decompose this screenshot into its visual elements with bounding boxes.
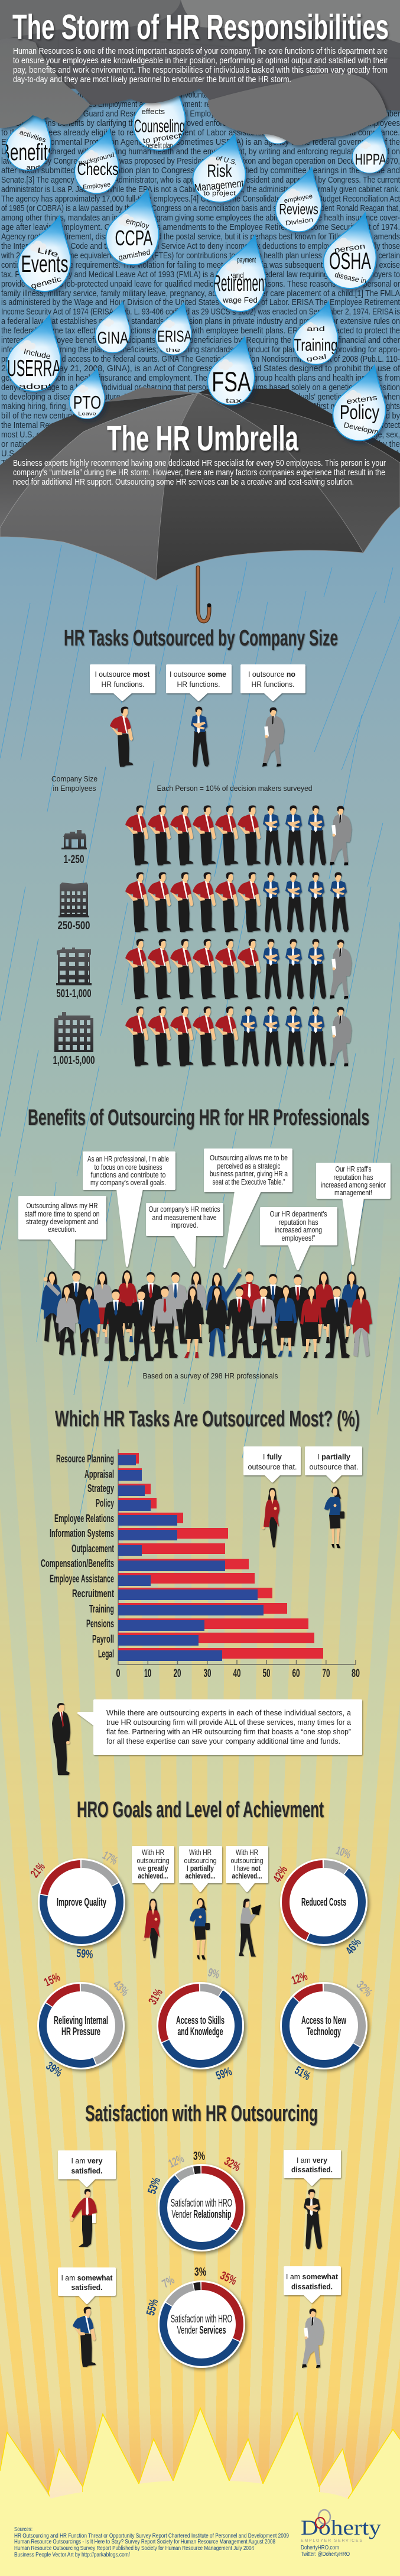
bubble: outsource some: I outsource some	[170, 670, 226, 679]
icon: tower: 1,001-5,000	[53, 1055, 95, 1067]
row: Payroll	[92, 1633, 314, 1646]
axis lines and ticks	[118, 1449, 356, 1665]
legend bubbles and people	[91, 666, 304, 767]
row: Information Systems: Information Systems	[50, 1527, 114, 1539]
yellow spike edges	[0, 2408, 400, 2499]
drop: Events: Life	[37, 245, 59, 259]
donut: Vendor Services: 3%	[194, 2266, 206, 2279]
donut: Improve Quality: 17%	[100, 1849, 119, 1868]
callout: one stop shop: flat fee. Partnering with an HR outsourcing firm that boasts a “one stop shop”	[106, 1727, 351, 1736]
bubble: somewhat satisfied: satisfied.	[71, 2283, 103, 2292]
donut: Access to New Technology: 51%	[292, 2064, 313, 2083]
drop: Reviews: Reviews	[279, 202, 318, 218]
bubble: department reputation: Our HR department's	[269, 1210, 327, 1218]
person: red shirt	[110, 706, 133, 767]
drop: GINA	[95, 301, 130, 353]
drop: Retirement: Retirement	[213, 271, 268, 296]
drop: PTO: PTO	[73, 391, 101, 413]
row: Employee Assistance: Employee Assistance	[50, 1573, 114, 1585]
axis numbers: 20	[174, 1667, 181, 1680]
bubble: strategic partner: perceived as a strategic	[217, 1162, 280, 1170]
drop: ERISA	[155, 303, 192, 355]
bubble: senior management: Our HR staff's	[336, 1165, 371, 1173]
row: 250-500 people	[125, 872, 349, 932]
callout: one stop shop: for all these expertise can save your company additional time and funds.	[106, 1737, 340, 1746]
row: Compensation/Benefits	[41, 1558, 249, 1571]
donut: Relieving Internal HR Pressure: 43%	[110, 1978, 131, 1999]
drop: Events: genetic	[30, 274, 63, 290]
icon: tower	[53, 1012, 95, 1067]
row: Strategy: Strategy	[87, 1482, 114, 1494]
axis label: company size: in Empolyees	[53, 784, 96, 793]
bubble: strategic partner: seat at the Executive Table.”	[213, 1178, 285, 1186]
donut: Vendor Services: Vender Services	[177, 2324, 226, 2336]
row: Employee Assistance	[50, 1573, 255, 1586]
row: 1001-5000 people	[125, 1006, 352, 1066]
bubble: department reputation: reputation has	[279, 1218, 318, 1227]
donut: Access to New Technology: 32%	[354, 1978, 375, 2000]
bubble: not achieved: outsourcing	[230, 1857, 264, 1865]
row: Policy	[96, 1497, 157, 1511]
bubble: department reputation	[261, 1208, 336, 1269]
donut: Vendor Relationship: Satisfaction with HRO	[171, 2197, 232, 2209]
bubble: outsource some	[167, 666, 230, 700]
drop: Benefits: and	[26, 164, 40, 171]
drop: Retirement: and	[232, 271, 244, 280]
bubble: very dissatisfied: dissatisfied.	[291, 2165, 333, 2174]
person: woman grey blouse	[239, 1899, 261, 1957]
donut: Access to Skills and Knowledge: 9%	[207, 1966, 221, 1981]
bubble: very satisfied: satisfied.	[71, 2166, 103, 2175]
satisfaction bubbles and people	[59, 2151, 340, 2368]
drop: Events: Events	[21, 251, 69, 277]
bubble: senior management: management!	[334, 1189, 372, 1197]
drop: Risk Management	[193, 134, 246, 202]
logo: Doherty: Twitter: @DohertyHRO	[301, 2551, 350, 2558]
bubble: senior management: reputation has	[333, 1173, 373, 1182]
person: woman blue jacket	[324, 1487, 344, 1548]
bubble: not achieved: achieved...	[232, 1872, 262, 1880]
drop: hidden behind cloud	[263, 102, 292, 144]
person: woman blue jacket	[190, 1898, 210, 1959]
person: grey suit	[262, 707, 284, 767]
drop: FSA: FSA	[212, 366, 251, 398]
donut: Access to Skills and Knowledge	[147, 1966, 244, 2082]
row: 1-250 people	[125, 805, 352, 865]
donut: Improve Quality: 59%	[76, 1947, 94, 1961]
legend note: Each Person = 10% of decision makers surveyed	[157, 784, 312, 793]
drop: Risk Management: of U.S.	[215, 154, 238, 167]
bubble: focus on core: my company's overall goals.	[90, 1179, 166, 1187]
bubble: focus on core	[84, 1153, 174, 1266]
bubble: not achieved: I have not	[233, 1864, 261, 1873]
cloud: right grey bank	[208, 73, 388, 145]
row: Recruitment: Recruitment	[72, 1588, 114, 1600]
bubble: staff time	[19, 1197, 105, 1268]
donut: Vendor Relationship: 32%	[222, 2155, 243, 2174]
drop: USERRA: Include	[23, 346, 51, 361]
intro paragraph	[13, 46, 388, 85]
donut: Reduced Costs: 42%	[271, 1864, 290, 1885]
drop: Training: goal	[306, 353, 327, 363]
row: 501-1000 people	[125, 939, 352, 999]
icon: mid building: 250-500	[58, 920, 90, 932]
person: red shirt with papers	[69, 2189, 97, 2247]
bubble: outsource no	[242, 666, 304, 700]
icon: small office	[61, 830, 87, 866]
donut: Vendor Services	[144, 2266, 245, 2368]
bubble: department reputation: increased among	[275, 1226, 322, 1234]
drop: OSHA: disease in	[334, 270, 368, 285]
bubble: somewhat dissatisfied	[285, 2267, 340, 2302]
sources: Human Resource Outsourcing Survey Report Published by Society for Human Resource Management July 2004	[14, 2545, 254, 2552]
drop: FSA	[207, 337, 255, 405]
drop: Retirement	[213, 235, 268, 312]
bubble: greatly achieved	[133, 1847, 173, 1891]
drop: Policy	[333, 365, 386, 440]
drop: Retirement: payment	[237, 256, 256, 264]
bubble: partially: outsource that.	[310, 1462, 358, 1471]
donut: Access to New Technology: 12%	[290, 1970, 310, 1987]
person: blue shirt	[191, 706, 209, 767]
axis numbers: 70	[323, 1667, 330, 1680]
row: Payroll: Payroll	[92, 1633, 114, 1645]
drop: PTO	[69, 368, 105, 418]
drop: Benefits: activities	[18, 129, 47, 144]
bubble: department reputation: employees!”	[281, 1234, 316, 1242]
intro paragraph: day-to-day and they are most likely personnel to encounter the brunt of the HR storm.	[13, 74, 291, 85]
logo: Doherty	[301, 2510, 381, 2558]
bubble: greatly achieved: outsourcing	[137, 1857, 170, 1865]
raindrops falling from the storm	[0, 76, 387, 391]
bar chart: tasks outsourced	[41, 1449, 360, 1680]
axis numbers: 50	[262, 1667, 271, 1680]
cloud: left grey bank	[0, 38, 90, 128]
axis label: company size: Company Size	[51, 774, 97, 783]
umbrella canopy panels	[106, 387, 198, 402]
survey note: Based on a survey of 298 HR professionals	[143, 1371, 278, 1380]
axis numbers: 0	[116, 1667, 121, 1680]
bubble: focus on core: functions and contribute to	[91, 1171, 166, 1179]
drop: Risk Management: Management	[194, 178, 245, 194]
sources: Human Resource Outsourcings - Is It Here to Stay? Survey Report Society for Human Resource Management August 2008	[14, 2538, 275, 2545]
drop: HIPPA	[352, 126, 387, 173]
donut: Relieving Internal HR Pressure	[37, 1971, 131, 2079]
bubble: somewhat satisfied: I am somewhat	[61, 2273, 113, 2282]
row: Legal: Legal	[98, 1648, 114, 1660]
callout: one stop shop: While there are outsourcing experts in each of these individual sectors, a	[106, 1708, 352, 1717]
sources: Sources:	[14, 2526, 32, 2533]
person: woman red coat	[262, 1488, 279, 1547]
axis numbers: 60	[292, 1667, 300, 1680]
background sun rays	[0, 1328, 400, 2494]
bubble: metrics: Our company's HR metrics	[149, 1205, 220, 1214]
raised arm, front row	[44, 1277, 59, 1295]
drop: CCPA: garnished	[118, 248, 151, 262]
axis numbers: 80	[352, 1667, 360, 1680]
background legal text wall	[1, 90, 400, 468]
sources: HR Outsourcing and HR Function Threat or Opportunity Survey Report Chartered Institute of Personnel and Development 2009	[14, 2532, 289, 2539]
bubble: fully	[245, 1448, 300, 1481]
bubble: staff time: Outsourcing allows my HR	[26, 1202, 98, 1210]
drop: Background Checks: Background	[78, 151, 115, 167]
row: Appraisal: Appraisal	[84, 1468, 114, 1480]
row: Outplacement: Outplacement	[71, 1543, 114, 1555]
drop: ERISA: the	[165, 347, 180, 353]
row: Employee Relations: Employee Relations	[54, 1513, 114, 1524]
donut: Access to New Technology: Access to New	[301, 2014, 347, 2026]
bubble: staff time: staff more time to spend on	[25, 1210, 100, 1218]
person: woman red coat	[142, 1899, 160, 1958]
drop: Background Checks: Checks	[77, 160, 118, 179]
bubble: outsource most	[91, 666, 154, 700]
bubble: somewhat dissatisfied: dissatisfied.	[291, 2282, 333, 2291]
axis numbers: 40	[233, 1667, 241, 1680]
logo rings	[316, 2510, 330, 2528]
bubble: partially achieved	[180, 1847, 221, 1891]
bubble: greatly achieved: achieved...	[138, 1872, 168, 1880]
row: Recruitment	[72, 1588, 272, 1600]
bubble: partially achieved: outsourcing	[184, 1857, 217, 1865]
axis numbers	[116, 1667, 360, 1680]
bubble: outsource no: HR functions.	[252, 680, 294, 689]
crowd of HR professionals	[41, 1268, 372, 1361]
rain streaks	[0, 545, 400, 1522]
sources	[14, 2526, 289, 2558]
drop: Counseling: to protect	[142, 131, 182, 145]
drop: Counseling: effects	[141, 108, 165, 116]
donut: Vendor Relationship: Vender Relationship	[171, 2208, 232, 2220]
donut: Vendor Services: 35%	[218, 2269, 239, 2288]
callout: one stop shop: true HR outsourcing firm will provide ALL of these services, many times for a	[106, 1718, 352, 1727]
drop: CCPA: CCPA	[115, 226, 153, 250]
bubble: very dissatisfied: I am very	[297, 2156, 328, 2165]
drop: Training: Training	[294, 336, 337, 355]
cloud: upper light bank	[181, 0, 400, 43]
donut: Access to Skills and Knowledge: 59%	[214, 2065, 234, 2082]
raised arm, back row	[225, 1268, 241, 1299]
drop: Policy: Policy	[340, 401, 380, 424]
bubble: very dissatisfied	[285, 2151, 340, 2185]
donut: Access to Skills and Knowledge: Access to Skills	[176, 2014, 225, 2026]
drop: CCPA: employ	[125, 216, 151, 231]
person: blue shirt	[73, 2306, 96, 2367]
sunburst footer	[0, 2406, 400, 2576]
drop: OSHA: OSHA	[329, 248, 371, 274]
bubble: greatly achieved: we greatly	[138, 1864, 168, 1873]
bubble: metrics	[147, 1204, 222, 1266]
donut: Relieving Internal HR Pressure: 15%	[43, 1971, 62, 1989]
donut: Improve Quality: 21%	[28, 1860, 48, 1880]
icon: small office: 1-250	[64, 854, 84, 866]
drop: Training	[293, 301, 338, 364]
bubble: fully: I fully	[263, 1452, 282, 1461]
drop: OSHA: person	[334, 241, 366, 255]
row: Policy: Policy	[96, 1497, 114, 1509]
axis label: company size	[51, 774, 97, 793]
bubble: partially achieved: I partially	[187, 1864, 214, 1873]
logo: Doherty: EMPLOYER SERVICES	[301, 2539, 363, 2543]
bubble: focus on core: As an HR professional, I'm able	[87, 1155, 169, 1163]
drop: Training: and	[307, 326, 325, 333]
logo: Doherty: DohertyHRO.com	[301, 2544, 339, 2551]
donut: Vendor Relationship: 3%	[193, 2150, 205, 2163]
drop: CCPA	[106, 189, 159, 265]
drop: Reviews: Division	[285, 216, 314, 227]
donut: Vendor Relationship: 53%	[145, 2176, 164, 2196]
donut: Relieving Internal HR Pressure: 39%	[44, 2059, 64, 2079]
icon: large building	[56, 948, 92, 1000]
bubble: staff time: strategy development and	[26, 1218, 98, 1226]
bubble: metrics: improved.	[170, 1221, 199, 1229]
bubble: outsource most: I outsource most	[95, 670, 150, 679]
row: Pensions: Pensions	[86, 1618, 114, 1630]
small spikes	[48, 2439, 353, 2503]
drop: USERRA: adopt	[18, 382, 52, 391]
row: Training	[89, 1603, 287, 1615]
umbrella handle	[198, 567, 212, 621]
donut: Reduced Costs: 46%	[343, 1936, 364, 1957]
axis numbers: 10	[144, 1667, 151, 1680]
donut: Improve Quality: Improve Quality	[57, 1896, 106, 1908]
bubble: not achieved: With HR	[236, 1848, 258, 1857]
row: Pensions	[86, 1618, 308, 1631]
bubble: partially achieved: With HR	[189, 1848, 212, 1857]
drop: Counseling: Counseling	[134, 116, 185, 136]
bubble: somewhat satisfied	[59, 2269, 115, 2303]
donut: Access to New Technology	[280, 1970, 375, 2083]
umbrella paragraph	[13, 458, 386, 487]
donut: Access to Skills and Knowledge: 31%	[147, 1987, 165, 2007]
bubble: outsource most: HR functions.	[102, 680, 144, 689]
drop: Policy: extens	[346, 392, 378, 406]
drop: Policy: Developm	[343, 420, 379, 436]
row: Outplacement	[71, 1543, 225, 1556]
donut: Relieving Internal HR Pressure: Relieving Internal	[54, 2014, 108, 2026]
donut: Relieving Internal HR Pressure: HR Pressure	[61, 2026, 100, 2038]
cloud: dark centre bank	[59, 35, 400, 112]
drop: ERISA: ERISA	[157, 327, 192, 345]
heading: The HR Umbrella: The HR Umbrella	[107, 419, 299, 458]
benefit speech bubbles	[19, 1150, 389, 1269]
umbrella	[0, 387, 400, 621]
drop: Risk Management: Risk	[207, 161, 232, 181]
row: Resource Planning: Resource Planning	[56, 1453, 114, 1465]
person: man in suit	[52, 1703, 70, 1775]
donut: Vendor Services: 55%	[144, 2298, 161, 2317]
logo: Doherty: Doherty	[301, 2516, 381, 2539]
donut: Reduced Costs: 10%	[334, 1844, 353, 1861]
drop: Reviews: employee	[284, 193, 313, 205]
front spikes and base	[0, 2408, 400, 2576]
bubble: partially achieved: achieved...	[186, 1872, 215, 1880]
bubble: strategic partner: business partner, giving HR a	[210, 1170, 288, 1178]
drop: USERRA	[6, 315, 61, 391]
bubble: metrics: and measurement have	[152, 1214, 217, 1222]
bubble: fully: outsource that.	[248, 1462, 297, 1471]
row: Legal	[98, 1648, 323, 1661]
donut: Reduced Costs	[271, 1844, 368, 1957]
donut: Access to New Technology: Technology	[307, 2026, 341, 2038]
callout: one stop shop	[79, 1701, 361, 1754]
bubble: senior management: increased among senior	[321, 1181, 386, 1189]
drop: OSHA	[323, 213, 376, 288]
drops landing on the umbrella	[69, 337, 386, 440]
donut: Improve Quality	[28, 1849, 125, 1961]
drop: GINA: GINA	[97, 329, 129, 347]
person: grey suit	[302, 2308, 324, 2368]
storm clouds	[0, 0, 400, 145]
bubble: very satisfied	[59, 2152, 115, 2186]
bubble: outsource no: I outsource no	[248, 670, 295, 679]
row: Training: Training	[89, 1603, 114, 1615]
drop: Benefits	[5, 115, 56, 176]
bubble: strategic partner	[205, 1150, 291, 1267]
bubble: staff time: execution.	[48, 1225, 76, 1234]
sources: Business People Vector Art by http://parkablogs.com/	[14, 2551, 130, 2558]
drop: Benefits: Benefits	[0, 139, 56, 166]
donut: Reduced Costs: Reduced Costs	[301, 1896, 346, 1908]
row: Strategy	[87, 1482, 151, 1496]
drop: Counseling	[133, 76, 186, 150]
bubble: greatly achieved: With HR	[142, 1848, 164, 1857]
cloud: upper left bank	[0, 0, 181, 40]
drop: Events	[18, 216, 71, 291]
goal legend	[133, 1847, 267, 1959]
bubble: not achieved	[227, 1847, 267, 1891]
bubble: outsource some: HR functions.	[177, 680, 220, 689]
row: Information Systems	[50, 1527, 228, 1540]
bubble: strategic partner: Outsourcing allows me to be	[210, 1154, 288, 1162]
bubble: focus on core: to focus on core business	[95, 1163, 162, 1172]
bubble: partially: I partially	[317, 1452, 351, 1461]
drop: PTO: Leave	[78, 410, 96, 416]
donut: Vendor Services: Satisfaction with HRO	[171, 2313, 232, 2325]
bubble: partially	[306, 1448, 361, 1481]
drop: Background Checks	[74, 129, 119, 193]
drop: Reviews	[275, 167, 321, 232]
drop: Risk Management: to project	[203, 189, 236, 197]
bubble: senior management	[317, 1164, 389, 1264]
drop: FSA: tax	[226, 397, 242, 405]
axis numbers: 30	[203, 1667, 212, 1680]
donut: Access to Skills and Knowledge: and Knowledge	[177, 2026, 223, 2038]
donut: Vendor Relationship	[145, 2150, 245, 2251]
drop: Retirement: wage Fed	[222, 296, 258, 304]
icon: mid building	[58, 883, 90, 932]
icon: large building: 501-1,000	[57, 988, 91, 1000]
bubble: very satisfied: I am very	[71, 2156, 103, 2165]
donut: Vendor Relationship: 12%	[167, 2152, 186, 2171]
person: black shirt arms crossed	[304, 2189, 322, 2249]
chart legend bubbles	[245, 1448, 361, 1548]
drop: Background Checks: Employee	[83, 181, 111, 191]
drop: USERRA: USERRA	[7, 356, 61, 381]
bubble: somewhat dissatisfied: I am somewhat	[286, 2272, 339, 2281]
donut: Vendor Services: 7%	[160, 2273, 177, 2291]
row: Compensation/Benefits: Compensation/Benefits	[41, 1558, 114, 1569]
drop: Counseling: benefit plan	[146, 141, 173, 150]
